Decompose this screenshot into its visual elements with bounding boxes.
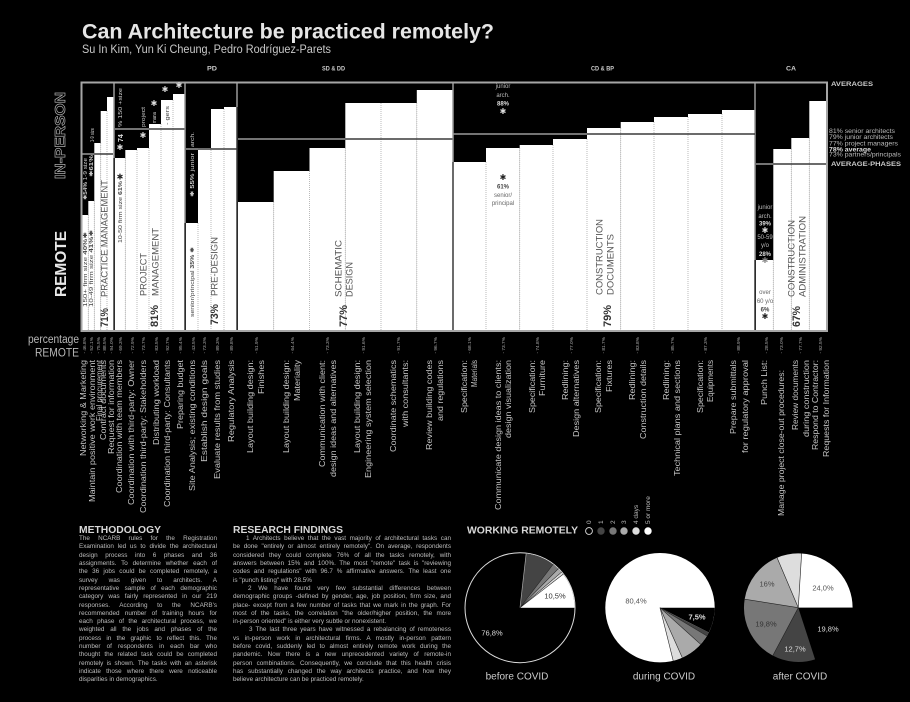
annotations: pre-design: arch. [190, 131, 196, 147]
pie chart: during COVID: during COVID [633, 672, 695, 682]
annotations: schematic design: DESIGN [344, 262, 356, 297]
pie chart: after COVID: 19,8% [755, 620, 777, 628]
pie chart: before COVID [465, 553, 575, 682]
annotations: pre-design: 73% [209, 304, 221, 325]
title: Can Architecture be practiced remotely? [82, 20, 494, 43]
text block: methodology: assignments. To determine whether each of [79, 560, 217, 567]
pie chart: after COVID: 24,0% [812, 584, 834, 592]
task percentages: - 28.5% [764, 336, 770, 354]
text block: methodology: remotely is shown. The tasks with an asterisk [79, 660, 217, 667]
annotations: construction administration: junior [757, 205, 772, 211]
task labels: Design alternatives [571, 360, 581, 437]
task labels: Evaluate results from studies [212, 360, 222, 479]
task labels: design visualization [503, 360, 513, 438]
task labels: Communication with client: [317, 360, 327, 467]
task labels: Engineering system selection [363, 360, 373, 478]
heading: working remotely: WORKING REMOTELY [467, 524, 578, 536]
text block: research findings: codes and regulations" with 96.7 % affirmative answers. The least one [233, 568, 451, 575]
text block: methodology: the 36 jobs could be completed remotely, a [79, 568, 217, 575]
text block: methodology: Examination led us to divide the architectural [79, 543, 217, 550]
heading: methodology: METHODOLOGY [79, 524, 161, 536]
text block: research findings [233, 535, 451, 683]
task percentages: - 89.8% [229, 336, 235, 354]
task labels: Specification: [527, 360, 537, 413]
axis label: remote: REMOTE [53, 231, 70, 297]
task percentages: - 68.1% [467, 336, 473, 354]
task percentages: - 74.8% [535, 336, 541, 354]
text block: research findings: answers between 15% and 100%. The most "remote" task is "reviewing [233, 560, 451, 567]
text block: research findings: believe architecture can be practiced remotely. [233, 676, 364, 683]
task percentages: - 89.3% [215, 336, 221, 354]
text block: methodology: thought the related task could be completed [79, 651, 217, 658]
text block: research findings: has substantially changed the way architects practice, and how they [233, 668, 451, 675]
legend: days working remotely: 3 [621, 520, 628, 524]
phase headings: CD & BP [591, 66, 615, 72]
pie chart: before COVID: before COVID [486, 672, 548, 682]
task labels: during construction [801, 360, 811, 437]
pie chart: during COVID [605, 553, 715, 682]
annotations: construction administration: ADMINISTRATION [798, 216, 808, 297]
task labels: Equipments [705, 360, 715, 402]
pie chart: after COVID: 19,8% [817, 624, 839, 634]
text block: methodology: The NCARB rules for the Registration [79, 535, 217, 542]
annotations: project management: ✱ [117, 143, 124, 152]
annotations: project management: mana [152, 111, 158, 123]
task labels: Distributing workload [151, 360, 161, 445]
annotations: construction documents: arch. [496, 93, 510, 99]
average by role list: 73% partners/principals [829, 152, 901, 159]
task percentages: - 73.3% [202, 336, 208, 354]
task percentages: - 52.1% [89, 336, 95, 354]
task percentages [82, 336, 824, 354]
annotations: practice management [82, 128, 111, 327]
task percentages: - 43.5% [191, 336, 197, 354]
task percentages: - 73.3% [325, 336, 331, 354]
task labels [78, 359, 831, 516]
text block: research findings: person combinations. Consequently, we conclude that this health crisis [233, 660, 451, 667]
task labels: Coordination with team members [114, 360, 124, 493]
annotations: construction administration: arch. [758, 214, 772, 220]
task labels: Maintain positive work environment [87, 359, 97, 502]
task percentages: - 69.3% [118, 336, 124, 354]
annotations: schematic design [334, 240, 356, 327]
task labels: Specification: [593, 360, 603, 413]
task labels: Redlining: [661, 360, 671, 400]
text block: methodology: each phase of the architectural process, we [79, 618, 217, 625]
annotations: project management: 74 [118, 134, 125, 142]
annotations: pre-design [189, 131, 221, 325]
task labels: Layout building design: [281, 360, 291, 453]
task percentages: - 91.6% [361, 336, 367, 354]
text block: research findings: most of the tasks, the correlation "the older/higher position, the more [233, 610, 451, 617]
annotations: practice management: ✱61% [88, 155, 95, 177]
text block: methodology: survey was given to architects. A [79, 577, 217, 584]
task labels: and regulations [435, 360, 445, 421]
task labels: Redlining: [627, 360, 637, 400]
text block: research findings: 1 Architects believe that the vast majority of architectural tasks can [246, 535, 451, 542]
task percentages: - 91.7% [396, 336, 402, 354]
annotations: project management: PROJECT [138, 253, 150, 296]
annotations: construction documents [492, 84, 616, 327]
pie chart: during COVID: 7,5% [688, 612, 706, 622]
annotations: project management: - gers [165, 106, 171, 125]
annotations: construction administration: ✱ [762, 226, 769, 235]
legend: days working remotely: 4 days [633, 504, 640, 524]
annotations: project management: project [141, 106, 147, 127]
task percentages: - 92.5% [818, 336, 824, 354]
task labels: Review building codes [424, 360, 434, 450]
task labels: Specification: [459, 360, 469, 413]
task labels: Establish design goals [199, 360, 209, 462]
annotations: pre-design: PRE-DESIGN [210, 237, 220, 296]
authors subtitle: Su In Kim, Yun Ki Cheung, Pedro Rodríguez-Parets [82, 44, 331, 56]
task labels: Preparing budget [175, 359, 185, 429]
text block: research findings: pandemic. Now there is a new unprecedented variety of remote-in [233, 651, 451, 658]
annotations: project management: MANAGEMENT [150, 228, 162, 296]
task labels: Requests for Information [821, 360, 831, 457]
text block: methodology: process in the graphic to reflect this. The [79, 635, 217, 642]
task labels: Technical plans and sections [672, 360, 682, 476]
pie chart: after COVID: 12,7% [784, 644, 806, 654]
annotations: construction administration: ✱ [762, 256, 769, 265]
task labels: Request for information [106, 360, 116, 454]
task percentages: - 96.7% [433, 336, 439, 354]
annotations: construction documents: 79% [602, 305, 614, 327]
task percentages: - 88.9% [736, 336, 742, 354]
annotations: schematic design: 77% [338, 305, 350, 327]
task percentages: - 77.0% [569, 336, 575, 354]
task labels: Manage project close-out procedures: [776, 370, 786, 516]
task labels: Coordination third-party: Stakeholders [138, 360, 148, 513]
annotations: practice management: 1-9 size [90, 128, 96, 142]
task labels: Construction details [638, 360, 648, 439]
annotations: construction documents: ✱ [500, 173, 507, 182]
annotations: construction documents: DOCUMENTS [606, 234, 616, 295]
annotations: pre-design: senior/principal 35% ✱ [189, 247, 196, 317]
annotations: practice management: 150+ firm size 40%✱ [82, 232, 89, 307]
phase headings: PD [207, 66, 217, 72]
annotations: construction documents: 61% [497, 184, 510, 190]
annotations: practice management: 71% [99, 308, 111, 327]
task percentages: - 77.7% [798, 336, 804, 354]
task labels: Contract documents [98, 360, 108, 440]
annotations: construction administration: over [759, 290, 771, 296]
annotations: practice management: ✱54% 1-9 size [82, 158, 89, 200]
annotations: construction documents: 88% [497, 102, 510, 108]
text block: research findings: place- except from a few number of tasks that we mark in the graph. For [233, 602, 451, 609]
task percentages: - 75.5% [96, 336, 102, 354]
task labels: Site Analysis; existing conditions [187, 360, 197, 491]
text block: research findings: be done "entirely or almost entirely remotely". On average, respondents [233, 543, 451, 550]
task percentages: - 95.4% [178, 336, 184, 354]
bars [82, 90, 827, 331]
axis label: percentage remote: REMOTE [35, 348, 79, 360]
text block: methodology: responses. According to the NCARB's [79, 602, 217, 609]
text block: methodology: category was fairly represented in our 219 [79, 593, 217, 600]
legend: days working remotely: 0 [586, 520, 593, 524]
task percentages: - 87.3% [703, 336, 709, 354]
annotations: construction documents: CONSTRUCTION [594, 219, 606, 295]
task labels: Materials [469, 360, 479, 387]
annotations: practice management: 10-49 firm size 41%✱ [88, 230, 95, 307]
annotations: construction administration: 28% [759, 252, 772, 258]
text block: research findings: 3 The last three years have witnessed a rebalancing of remoteness [249, 626, 451, 633]
task labels: Communicate design ideas to clients: [493, 360, 503, 510]
annotations: project management: 10-50 firm size 61% [118, 181, 124, 243]
annotations: project management: ✱ [176, 81, 183, 90]
legend: average-phases: AVERAGE-PHASES [831, 161, 902, 168]
pie chart: before COVID: 10,5% [544, 592, 566, 600]
task percentages: - 51.9% [254, 336, 260, 354]
task percentages: - 85.7% [670, 336, 676, 354]
task labels: Prepare submittals [728, 360, 738, 434]
task labels: Materiality [292, 359, 302, 401]
annotations: project management [117, 81, 183, 327]
task labels: Redlining: [560, 360, 570, 400]
task labels: Furniture [537, 360, 547, 396]
text block: methodology: recommended number of training hours for [79, 610, 217, 617]
task labels: Fixtures [604, 360, 614, 392]
axis label: percentage remote: percentage [28, 334, 79, 346]
task percentages: - 88.5% [102, 336, 108, 354]
annotations: construction administration: CONSTRUCTION [786, 220, 798, 297]
average by role list: 77% project managers [829, 140, 898, 147]
average by role list: 78% average [829, 146, 872, 153]
annotations: construction administration: 67% [791, 306, 803, 327]
task percentages: - 73.7% [501, 336, 507, 354]
annotations: construction administration: 50-59 [757, 235, 773, 241]
annotations: construction administration: ✱ [762, 312, 769, 321]
heading: research findings: RESEARCH FINDINGS [233, 524, 343, 536]
task percentages: - 94.0% [109, 336, 115, 354]
annotations: construction administration: 6% [761, 308, 770, 314]
average by role list [829, 128, 901, 159]
task labels: Specification: [695, 360, 705, 413]
task labels: Respond to Contractor: [810, 360, 820, 450]
annotations: construction documents: junior [495, 84, 510, 90]
annotations: project management: ✱ [117, 172, 124, 182]
task labels: design ideas and alternatives [328, 360, 338, 477]
task labels: Coordinate schematics [388, 360, 398, 452]
text block: research findings: demographic groups -defined by gender, age, job position, firm size, and [233, 593, 451, 600]
text block: methodology: disparities in demographics. [79, 676, 158, 683]
task percentages: - 83.8% [635, 336, 641, 354]
task percentages: - 92.7% [165, 336, 171, 354]
axis label: percentage remote [28, 334, 79, 360]
task labels: Layout building design: [245, 360, 255, 453]
annotations: construction documents: principal [492, 201, 514, 207]
phase headings [207, 66, 796, 72]
task percentages: - 46.8% [82, 336, 88, 354]
annotations: practice management: PRACTICE MANAGEMENT [100, 180, 110, 297]
annotations: construction administration: 39% [759, 222, 772, 228]
task percentages: - 83.5% [154, 336, 160, 354]
annotations: construction administration [757, 205, 808, 327]
text block: methodology [79, 535, 218, 683]
annotations: pre-design: ✱ 55% junior [189, 153, 196, 197]
text block: methodology: representative sample of each demographic [79, 585, 217, 592]
annotations: project management: ✱ [162, 85, 169, 94]
text block: research findings: vs in-person work in architectural firms. A mostly in-person pattern [233, 635, 451, 642]
task labels: Coordination with third-party: Owner [126, 360, 136, 505]
annotations: construction administration: y/o [761, 243, 770, 249]
task labels: Regulatory Analysis [226, 360, 236, 442]
task labels: Final procurement [94, 359, 104, 421]
average by role list: 81% senior architects [829, 128, 895, 135]
pie chart: before COVID: 76,8% [481, 628, 503, 638]
task labels: Layout building design: [352, 360, 362, 453]
annotations: project management: ✱ [140, 131, 147, 140]
annotations: construction documents: senior/ [494, 193, 512, 199]
phase headings: CA [786, 66, 796, 72]
annotations: schematic design: SCHEMATIC [334, 240, 344, 297]
task percentages: - 72.9% [130, 336, 136, 354]
legend: days working remotely: 5 or more [645, 496, 652, 524]
pie chart: after COVID: after COVID [773, 672, 827, 682]
legend: days working remotely: 1 [598, 520, 605, 524]
text block: research findings: in-person oriented" is either very subtle or nonexistent. [233, 618, 386, 625]
task labels: Networking & Marketing [78, 360, 88, 456]
legend: averages: AVERAGES [831, 81, 874, 88]
task labels: Review documents [790, 360, 800, 430]
text block: research findings: considered they could complete 76% of all the tasks remotely, with [233, 552, 451, 559]
legend: days working remotely: 2 [610, 520, 617, 524]
task labels: Finishes [256, 360, 266, 394]
annotations: project management: ✱ [151, 99, 158, 108]
task labels: for regulatory approval [740, 360, 750, 453]
text block: methodology: weighted all the jobs and phases of the [79, 626, 217, 633]
task labels: Punch List: [759, 360, 769, 405]
annotations: project management: 81% [149, 305, 161, 327]
task labels: Coordination third-party: Consultants [162, 360, 172, 507]
annotations: construction documents: ✱ [500, 107, 507, 116]
task percentages: - 73.7% [141, 336, 147, 354]
text block: research findings: before covid, suddenly led to almost entirely remote work during the [233, 643, 451, 650]
task labels: with consultants: [400, 360, 410, 428]
axis label: in-person: IN-PERSON [52, 92, 69, 179]
task percentages: - 73.0% [779, 336, 785, 354]
phase headings: SD & DD [322, 66, 345, 72]
pie chart: after COVID [745, 554, 839, 682]
annotations: project management: % 150 +size [118, 88, 124, 127]
bar chart [81, 81, 827, 331]
text block: methodology: design process into 6 phases and 36 [79, 552, 217, 559]
text block: research findings: 2 We have found very few substantial differences between [248, 585, 451, 592]
text block: research findings: is "punch listing" with 28.5% [233, 577, 312, 584]
pie chart: during COVID: 80,4% [625, 596, 647, 606]
task percentages: - 81.7% [601, 336, 607, 354]
text block: methodology: indicate those where there were noticeable [79, 668, 217, 675]
average by role list: 79% junior architects [829, 134, 893, 141]
legend: days working remotely [586, 496, 652, 535]
annotations: construction administration: 60 y/o [757, 299, 774, 305]
task percentages: - 64.4% [290, 336, 296, 354]
text block: methodology: number of respondents in each bar who [79, 643, 217, 650]
pie chart: after COVID: 16% [759, 580, 775, 588]
